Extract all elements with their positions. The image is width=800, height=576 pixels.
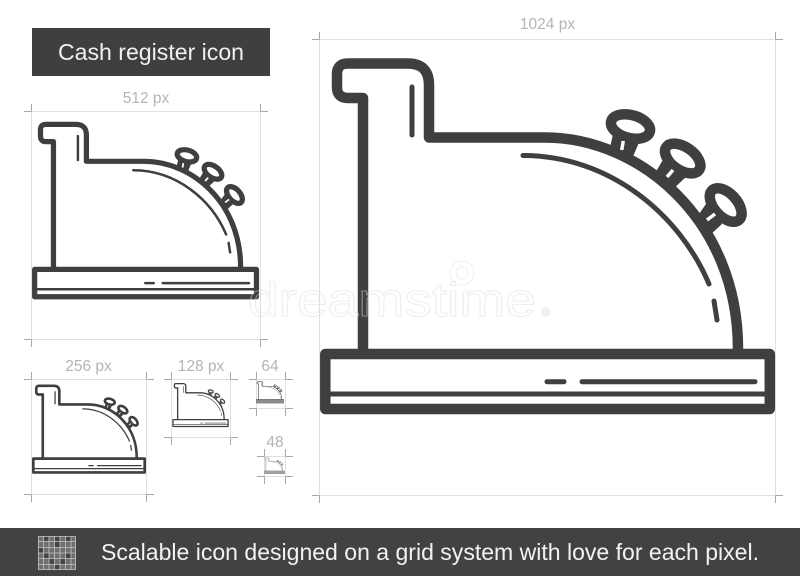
size label: 48: 48 [266, 434, 284, 451]
icon: cash register 256 px [33, 386, 145, 472]
size label: 256 px: 256 px [65, 358, 112, 375]
icon: cash register 64 px [256, 382, 284, 404]
icon: cash register 48 px [264, 458, 285, 474]
icon: cash register 128 px [173, 384, 228, 426]
title banner [32, 28, 270, 76]
watermark [248, 261, 551, 326]
guide frames [32, 40, 776, 496]
footer bar [0, 528, 800, 576]
footer tagline: Scalable icon designed on a grid system with love for each pixel. [101, 539, 759, 565]
size label: 128 px: 128 px [178, 358, 225, 375]
guide corner ticks [24, 32, 783, 503]
icon: pixel grid [38, 536, 76, 570]
title banner: Cash register icon [58, 39, 244, 65]
size label: 64: 64 [261, 358, 279, 375]
icon: cash register 1024 px [325, 64, 770, 409]
watermark: dreamstime [248, 273, 536, 326]
icon: cash register 512 px [34, 124, 257, 297]
size label: 512 px: 512 px [123, 90, 170, 107]
size label: 1024 px: 1024 px [520, 16, 575, 33]
